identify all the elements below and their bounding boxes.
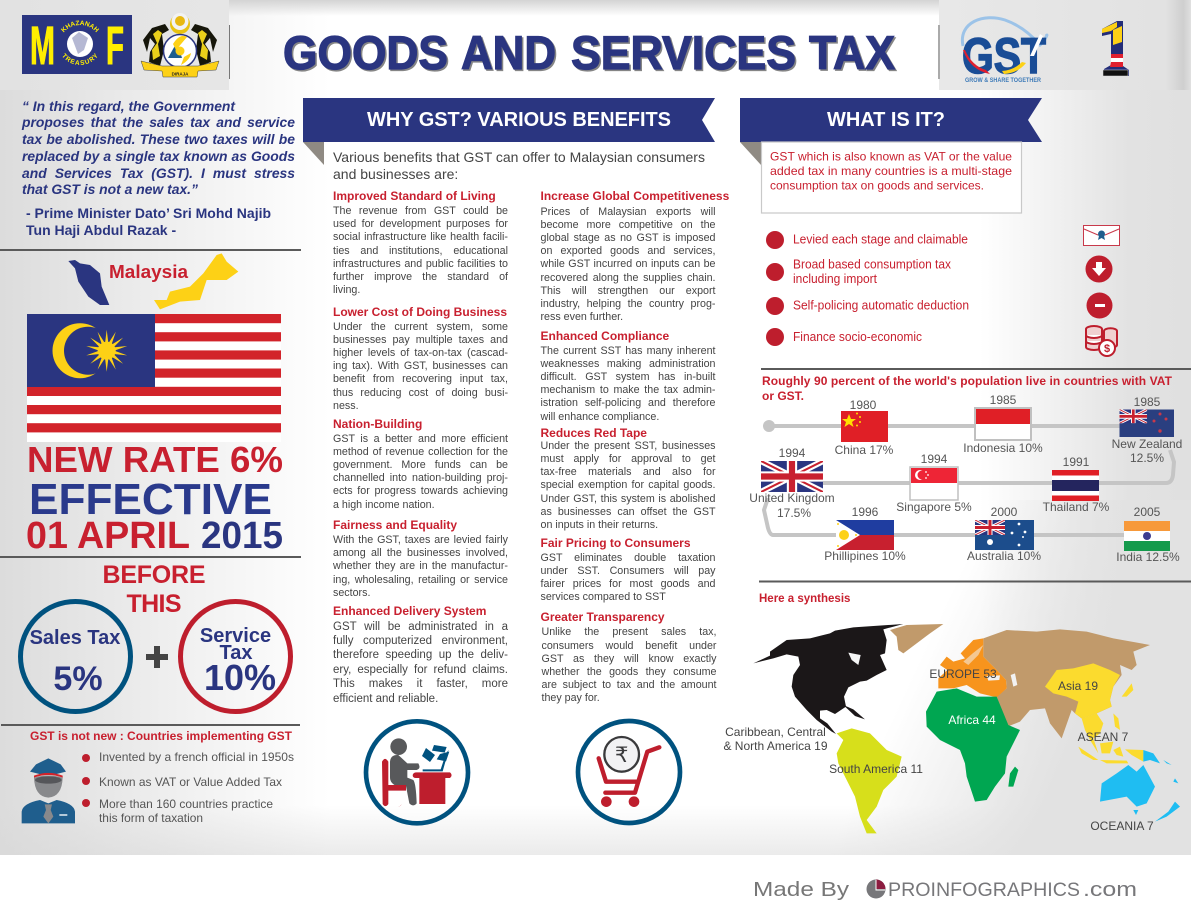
benefit text: red tape: on inputs in their returns. — [540, 519, 658, 531]
benefit text: competitiveness: while GST incurred on inputs can be — [540, 258, 716, 270]
new rate headline: EFFECTIVE — [29, 475, 272, 524]
benefit text: competitiveness: global stage as no GST is imposed — [540, 232, 716, 244]
timeline labels: 1985 — [990, 393, 1017, 407]
benefit text: living: further improve the standard of — [333, 271, 508, 283]
history list: this form of taxation — [99, 811, 203, 825]
world map — [753, 624, 1180, 833]
benefit text: compliance: The current SST has many inherent — [540, 344, 716, 356]
ribbon: what is it: WHAT IS IT? — [827, 109, 945, 131]
flag: Indonesia — [975, 408, 1031, 440]
quote: proposes that the sales tax and service — [22, 114, 295, 130]
benefit text: compliance: istration self-policing and therefore — [540, 397, 716, 409]
benefit text: delivery — [333, 620, 508, 705]
benefit text: fairness: sectors. — [333, 587, 370, 599]
benefit heading: fair pricing: Fair Pricing to Consumers — [540, 536, 691, 550]
ribbon: why GST: WHY GST? VARIOUS BENEFITS — [367, 109, 671, 131]
benefit text: competitiveness: This will strengthen our export — [540, 285, 716, 297]
flag: Australia — [975, 520, 1034, 550]
before this heading: THIS — [126, 590, 182, 618]
title: AND — [461, 26, 556, 79]
benefit text: delivery: This makes it faster, more — [333, 678, 508, 690]
new rate headline: 01 APRIL — [26, 515, 190, 557]
benefit text: red tape: Under the present SST, businesses — [540, 440, 716, 452]
history list: Known as VAT or Value Added Tax — [99, 775, 282, 789]
flag: Singapore — [910, 467, 958, 500]
benefit text: cost: benefit from recovering input tax, — [333, 373, 508, 385]
benefit text: living: infrastructures and public facilities to — [333, 258, 508, 270]
timeline labels: Singapore 5% — [896, 500, 972, 514]
flag: New Zealand — [1120, 410, 1174, 437]
circle: service tax: Service — [200, 625, 271, 647]
before this heading: BEFORE — [102, 561, 206, 589]
benefit text: nation: GST is a better and more efficient — [333, 432, 508, 444]
rule lines — [0, 250, 1191, 725]
benefit text: compliance: difficult. GST system has in-built — [540, 371, 716, 383]
feature list: Self-policing automatic deduction — [793, 298, 969, 312]
heading: world population — [762, 374, 1173, 403]
map labels: South America 11 — [829, 762, 923, 776]
logo: customs coat of arms: DIRAJA — [172, 72, 189, 76]
circle: sales tax: 5% — [53, 660, 103, 698]
Malaysia map: Malaysia — [109, 261, 189, 282]
benefits intro: Various benefits that GST can offer to Malaysian consumers — [333, 149, 705, 165]
definition box: GST which is also known as VAT or the value — [770, 150, 1012, 164]
logo: 1Malaysia — [1102, 21, 1129, 76]
timeline labels: India 12.5% — [1116, 550, 1180, 564]
timeline labels: Australia 10% — [967, 549, 1041, 563]
benefit text: fairness: With the GST, taxes are levied fairly — [333, 534, 508, 546]
benefit text: delivery: ery, especially for refund claims. — [333, 664, 508, 676]
footer: made by: PROINFOGRAPHICS — [888, 879, 1080, 901]
before this heading — [102, 561, 206, 618]
icon: shopping cart — [578, 721, 680, 823]
logo: Ministry of Finance Treasury: TREASURY — [62, 52, 98, 65]
flag: China — [841, 411, 888, 442]
icon: certificate envelope — [1084, 226, 1120, 246]
logo: Ministry of Finance Treasury: F — [106, 16, 124, 76]
benefit text: red tape: must apply for approval to get — [540, 453, 716, 465]
timeline labels: 17.5% — [777, 506, 811, 520]
benefit text: living: social infrastructure like health facili- — [333, 231, 508, 243]
logo: GST grow and share together: GROW & SHARE TOGETHER — [965, 77, 1041, 84]
quote: replaced by a single tax known as Goods — [22, 148, 295, 164]
footer: made by: .com — [1083, 879, 1137, 901]
benefit text: transparency: they pay for. — [542, 692, 600, 704]
definition box: added tax in many countries is a multi-stage — [770, 164, 1012, 178]
benefit text: red tape — [540, 440, 716, 531]
benefit text: fair pricing: under SST. Consumers will pay — [540, 565, 716, 577]
history list — [82, 750, 294, 825]
benefit heading: delivery: Enhanced Delivery System — [333, 604, 486, 618]
map labels: Asia 19 — [1058, 679, 1098, 693]
benefit text: cost: businesses pay multiple taxes and — [333, 334, 508, 346]
benefit text: living: ties and institutions, educational — [333, 245, 508, 257]
flag: United Kingdom — [761, 461, 823, 492]
benefit text: fair pricing: GST eliminates double taxation — [540, 552, 716, 564]
timeline labels: United Kingdom — [749, 491, 835, 505]
benefit text: competitiveness — [540, 206, 716, 323]
benefit text: transparency — [542, 626, 716, 704]
benefit text: cost: ness. — [333, 400, 359, 412]
title — [283, 26, 896, 80]
timeline labels: 1991 — [1063, 455, 1090, 469]
definition box — [762, 142, 1022, 213]
timeline labels: Thailand 7% — [1043, 500, 1110, 514]
benefit text: transparency: whether the goods they consume — [542, 666, 716, 678]
benefits intro — [333, 149, 705, 182]
benefit heading: compliance: Enhanced Compliance — [540, 328, 669, 342]
title: TAX — [809, 26, 895, 79]
benefit heading: nation: Nation-Building — [333, 416, 422, 430]
benefit text: transparency: Unlike the present sales tax, — [542, 626, 716, 638]
feature list: Finance socio-economic — [793, 330, 922, 344]
timeline labels: Phillipines 10% — [824, 549, 906, 563]
Malaysian flag — [27, 314, 281, 442]
circle: service tax: Tax — [220, 642, 252, 664]
footer: made by: Made By — [753, 879, 849, 901]
map labels: Caribbean, Central — [725, 725, 826, 739]
timeline path — [763, 420, 1174, 535]
icon: shopping cart: ₹ — [615, 743, 628, 768]
quote attribution: - Prime Minister Dato’ Sri Mohd Najib — [26, 204, 271, 220]
quote: “ In this regard, the Government — [22, 98, 235, 114]
ribbon: what is it — [740, 98, 1042, 165]
title: TAX — [810, 28, 896, 80]
title: GOODS — [283, 26, 448, 79]
feature list: Levied each stage and claimable — [793, 232, 968, 246]
new rate headline — [26, 439, 283, 557]
circle: service tax: 10% — [204, 657, 276, 698]
benefit text: fairness: ing, wholesaling, retailing or service — [333, 574, 508, 586]
benefit text: fair pricing — [540, 552, 716, 603]
quote: and Services Tax (GST). I must stress — [22, 165, 295, 181]
icon: coins: $ — [1104, 343, 1110, 355]
benefit text: delivery: fully computerized environment, — [333, 635, 508, 647]
benefit text: compliance — [540, 344, 716, 423]
benefit text: fairness: whether they are in the manufactur- — [333, 560, 508, 572]
logo: Ministry of Finance Treasury: KHAZANAH — [60, 20, 100, 32]
benefit heading: fairness: Fairness and Equality — [333, 518, 457, 532]
logo: Ministry of Finance Treasury: M — [30, 16, 55, 76]
logo: customs coat of arms — [141, 13, 219, 77]
benefit text: competitiveness: recovered along the supplies chain. — [540, 272, 716, 284]
benefit text: cost: thus reducing cost of doing busi- — [333, 387, 508, 399]
benefit text: cost: ing tax). With GST, businesses can — [333, 360, 508, 372]
new rate headline: 2015 — [201, 515, 283, 557]
benefit text: transparency: GST as they will know exactly — [542, 653, 716, 665]
heading: GST is not new: GST is not new : Countries implementing GST — [30, 729, 293, 743]
timeline labels: 2005 — [1134, 505, 1161, 519]
benefit heading: red tape: Reduces Red Tape — [540, 426, 647, 440]
heading: world population: or GST. — [762, 389, 804, 403]
benefit text: delivery: GST will be administrated in a — [333, 620, 508, 632]
plus sign — [146, 646, 168, 668]
benefit text: red tape: as businesses can offset the GST — [540, 506, 716, 518]
timeline labels: 12.5% — [1130, 451, 1164, 465]
icon: officer — [22, 758, 75, 823]
logo: Ministry of Finance Treasury — [22, 15, 132, 76]
benefit text: cost: higher levels of tax-on-tax (cascad- — [333, 347, 508, 359]
benefit heading: transparency: Greater Transparency — [540, 610, 665, 624]
benefit text: nation: government. More funds can be — [333, 459, 508, 471]
benefit heading: living: Improved Standard of Living — [333, 189, 496, 203]
benefit text: fairness: among all the businesses involved, — [333, 547, 508, 559]
benefit text: nation — [333, 432, 508, 511]
icon: minus — [1086, 292, 1112, 318]
quote attribution: Tun Haji Abdul Razak - — [26, 222, 176, 238]
history list: More than 160 countries practice — [99, 797, 273, 811]
benefit text: red tape: special exemption for capital goods. — [540, 479, 716, 491]
map labels — [723, 667, 1154, 833]
timeline labels: 1994 — [779, 446, 806, 460]
map labels: Africa 44 — [948, 713, 996, 727]
benefit text: living: The revenue from GST could be — [333, 205, 508, 217]
quote: tax be abolished. These two taxes will be — [22, 131, 295, 147]
benefit text: red tape: tax-free materials and also for — [540, 466, 716, 478]
benefit text: competitiveness: ress even further. — [540, 311, 623, 323]
benefit text: living: living. — [333, 284, 360, 296]
quote attribution — [26, 204, 271, 238]
benefit text: competitiveness: become more competitive on the — [540, 219, 716, 231]
title: SERVICES — [571, 26, 796, 79]
map labels: OCEANIA 7 — [1090, 819, 1154, 833]
Malaysia map — [68, 253, 238, 309]
benefit text: living: used for development purposes for — [333, 218, 508, 230]
map labels: & North America 19 — [723, 739, 828, 753]
timeline labels: 1980 — [850, 398, 877, 412]
benefit text: fair pricing: fairer prices for most goods and — [540, 578, 716, 590]
benefit text: competitiveness: industry, helping the country prog- — [540, 298, 716, 310]
benefit text: cost: Under the current system, some — [333, 320, 508, 332]
timeline labels: China 17% — [835, 443, 894, 457]
title: AND — [462, 28, 558, 80]
benefit text: compliance: weaknesses making administration — [540, 358, 716, 370]
icon: down arrow — [1086, 256, 1112, 282]
heading: world population: Roughly 90 percent of the world's population live in countries with VAT — [762, 374, 1173, 388]
quote — [22, 98, 295, 197]
quote: that GST is not a new tax.” — [22, 181, 198, 197]
timeline labels: 2000 — [991, 505, 1018, 519]
timeline labels: 1985 — [1134, 395, 1161, 409]
timeline labels: 1994 — [921, 452, 948, 466]
benefit text: competitiveness: Prices of Malaysian exports will — [540, 206, 716, 218]
circle: sales tax: Sales Tax — [30, 627, 120, 649]
benefit text: competitiveness: on exported goods and services, — [540, 245, 716, 257]
title: GOODS — [284, 28, 450, 80]
timeline labels: Indonesia 10% — [963, 441, 1043, 455]
benefit heading: cost: Lower Cost of Doing Business — [333, 305, 507, 319]
flag: India — [1124, 521, 1170, 551]
flag: Thailand — [1052, 470, 1099, 501]
benefits intro: and businesses are: — [333, 166, 458, 182]
benefit text: delivery: efficient and reliable. — [333, 693, 438, 705]
footer: made by — [753, 879, 1137, 901]
benefit text: nation: a high income nation. — [333, 499, 435, 511]
feature list: Broad based consumption tax — [793, 258, 952, 272]
benefit text: red tape: Under GST, this system is abolished — [540, 492, 716, 504]
benefit text: transparency: consumers would benefit under — [542, 640, 716, 652]
benefit heading: competitiveness: Increase Global Competitiveness — [540, 189, 729, 203]
benefit text: fair pricing: services compared to SST — [540, 591, 666, 603]
definition box: consumption tax on goods and services. — [770, 178, 984, 192]
benefit text: compliance: mechanism to make the tax admin- — [540, 384, 716, 396]
benefit text: fairness — [333, 534, 508, 599]
flag: Philippines — [836, 520, 894, 550]
benefit text: living — [333, 205, 508, 296]
title: SERVICES — [572, 28, 798, 80]
icon: coins — [1086, 326, 1117, 356]
benefit text: delivery: therefore speeding up the deliv- — [333, 649, 508, 661]
feature list — [766, 231, 969, 346]
benefit text: nation: ects for progress towards achieving — [333, 485, 508, 497]
benefit text: nation: channelled into nation-building proj- — [333, 472, 508, 484]
timeline labels: New Zealand — [1112, 437, 1182, 451]
icon: person at desk — [366, 721, 468, 823]
benefit text: cost — [333, 320, 508, 412]
heading: synthesis: Here a synthesis — [759, 593, 850, 605]
circle: sales tax — [20, 602, 130, 712]
new rate headline: NEW RATE 6% — [27, 439, 283, 480]
ribbon: why GST — [303, 98, 715, 165]
circle: service tax — [180, 602, 290, 712]
logo: GST grow and share together: GST — [962, 28, 1046, 84]
benefit text: transparency: are subject to tax and the amount — [542, 679, 716, 691]
timeline labels — [749, 393, 1182, 564]
benefit text: nation: method of revenue collection for the — [333, 446, 508, 458]
timeline labels: 1996 — [852, 505, 879, 519]
benefit text: compliance: will enhance compliance. — [540, 411, 659, 423]
map labels: ASEAN 7 — [1078, 730, 1129, 744]
history list: Invented by a french official in 1950s — [99, 750, 294, 764]
map labels: EUROPE 53 — [929, 667, 997, 681]
feature list: including import — [793, 272, 878, 286]
